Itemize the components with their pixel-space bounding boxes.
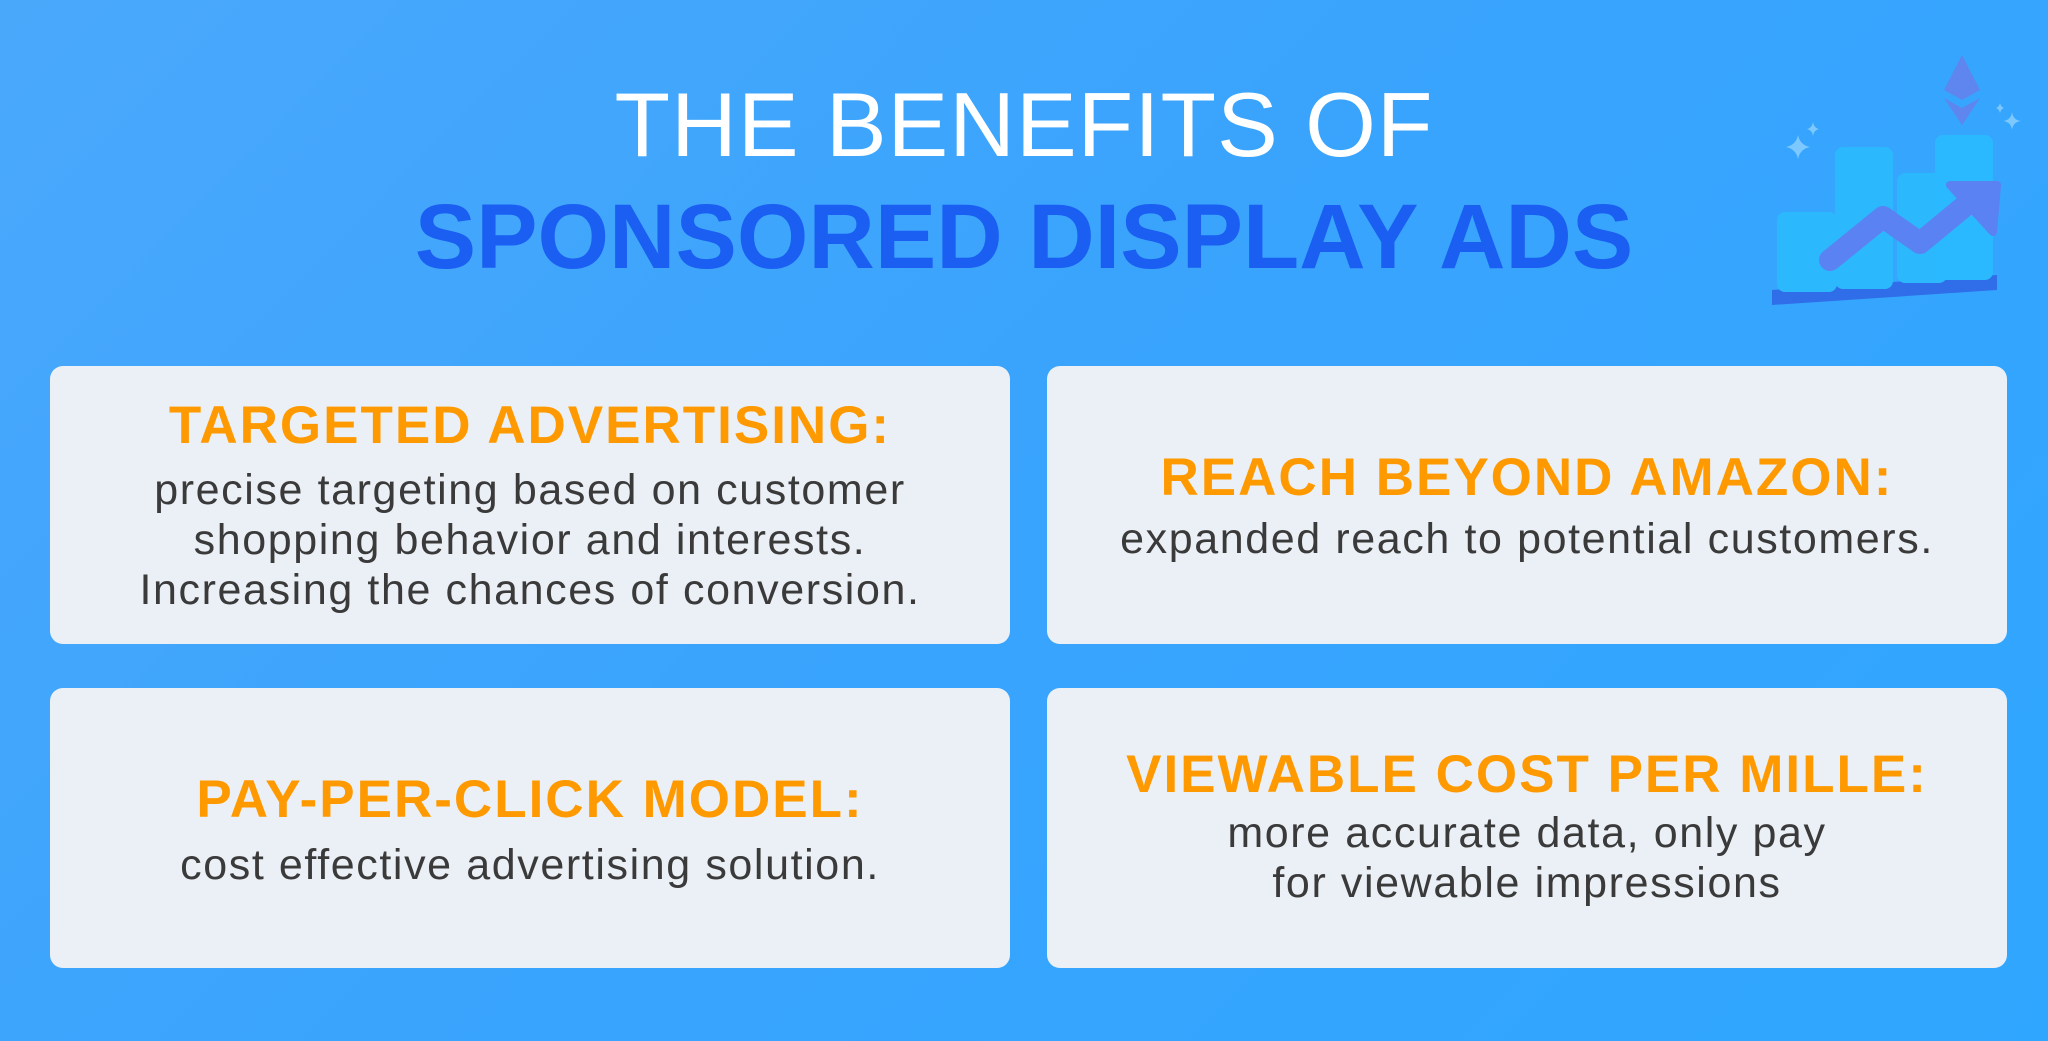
heading: REACH BEYOND AMAZON: [1161, 448, 1893, 507]
body text: cost effective advertising solution. [180, 841, 880, 889]
body text [139, 466, 921, 614]
body text: more accurate data, only pay [1227, 809, 1827, 857]
panel: viewable cpm [1047, 688, 2007, 968]
body text: Increasing the chances of conversion. [139, 566, 921, 614]
body text [1227, 809, 1827, 907]
body text: for viewable impressions [1272, 859, 1782, 907]
icon: bar chart with arrow [1772, 55, 2020, 305]
panel: reach beyond amazon [1047, 366, 2007, 644]
panel: targeted advertising [50, 366, 1010, 644]
panel: pay-per-click [50, 688, 1010, 968]
body text: precise targeting based on customer [154, 466, 906, 514]
body text: expanded reach to potential customers. [1120, 515, 1934, 563]
title line 1: THE BENEFITS OF [615, 75, 1433, 176]
body text: shopping behavior and interests. [194, 516, 866, 564]
heading: VIEWABLE COST PER MILLE: [1126, 745, 1928, 804]
title line 2: SPONSORED DISPLAY ADS [415, 186, 1633, 288]
title [415, 75, 1633, 288]
heading: PAY-PER-CLICK MODEL: [196, 770, 864, 829]
heading: TARGETED ADVERTISING: [169, 396, 891, 455]
